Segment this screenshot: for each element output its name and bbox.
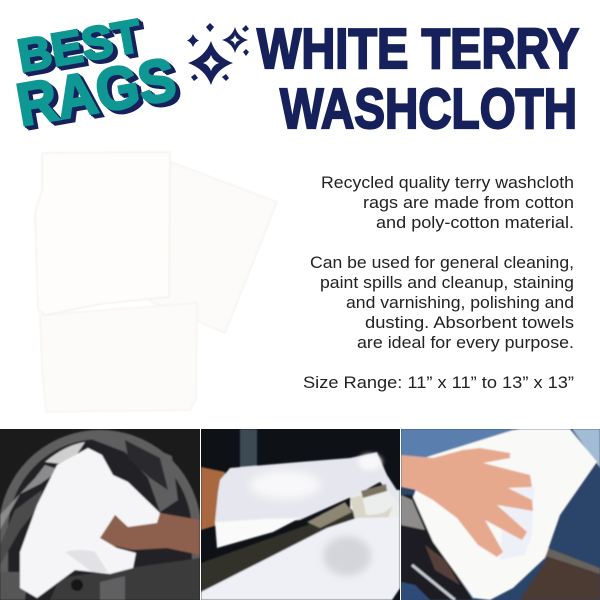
- size range: Size Range: 11” x 11” to 13” x 13”: [303, 373, 574, 392]
- logo word: BEST: BEST: [17, 12, 148, 84]
- photo: towel with wrench: [201, 429, 400, 600]
- car hood reflections: [401, 429, 515, 458]
- hand: [401, 448, 533, 557]
- towel: [413, 429, 597, 600]
- sparkle: right top dot: [242, 25, 249, 32]
- arm: [100, 513, 200, 555]
- photo: hand wiping car with towel: [401, 429, 600, 600]
- paragraph: material: Recycled quality terry washcloth: [321, 173, 574, 192]
- paragraph: uses: [310, 253, 574, 352]
- background strip: [240, 429, 257, 469]
- towel shadow between fingers: [500, 487, 535, 560]
- sparkle: bottom right dot: [222, 74, 229, 81]
- hand: [201, 467, 225, 530]
- paragraph: uses: dusting. Absorbent towels: [365, 313, 574, 332]
- sparkle: medium hollow star: [222, 27, 248, 53]
- towel hem: [215, 518, 300, 548]
- photo: towel on car wheel: [0, 429, 200, 600]
- towel: top: [35, 152, 170, 315]
- description text: [303, 173, 574, 392]
- paragraph: material: [321, 173, 574, 232]
- towel: bottom: [40, 303, 197, 412]
- paragraph: material: rags are made from cotton: [363, 193, 574, 212]
- wheel rim: [0, 430, 200, 600]
- towel behind wrench jaw: [350, 490, 400, 522]
- paragraph: uses: and varnishing, polishing and: [346, 293, 574, 312]
- logo word: RAGS: RAGS: [15, 48, 184, 141]
- towel: [20, 448, 160, 598]
- logo word: RAGS: RAGS: [12, 45, 181, 139]
- towel: right: [150, 162, 277, 333]
- title: [257, 17, 579, 141]
- sparkle: left lower dot: [191, 74, 198, 81]
- icon: sparkles: [187, 23, 249, 85]
- logo word: RAGS: RAGS: [16, 49, 186, 143]
- sparkle: top dot: [206, 23, 214, 32]
- logo word: BEST: BEST: [18, 13, 150, 86]
- paragraph: material: and poly-cotton material.: [376, 213, 574, 232]
- logo word: BEST: BEST: [14, 9, 145, 82]
- logo word: BEST: BEST: [15, 10, 146, 83]
- paragraph: uses: Can be used for general cleaning,: [310, 253, 574, 272]
- towel: lower: [201, 517, 400, 600]
- sparkle: large hollow star: [188, 41, 233, 85]
- sparkle: small star: [187, 34, 199, 47]
- logo word: RAGS: RAGS: [13, 46, 182, 140]
- towel: upper: [215, 452, 400, 523]
- wrench: [201, 505, 360, 592]
- paragraph: uses: are ideal for every purpose.: [357, 333, 574, 352]
- product photo: white washcloths: [35, 152, 277, 412]
- logo: Best Rags: [12, 8, 186, 143]
- paragraph: uses: paint spills and cleanup, staining: [320, 273, 574, 292]
- sparkle: right lower dot: [243, 49, 249, 56]
